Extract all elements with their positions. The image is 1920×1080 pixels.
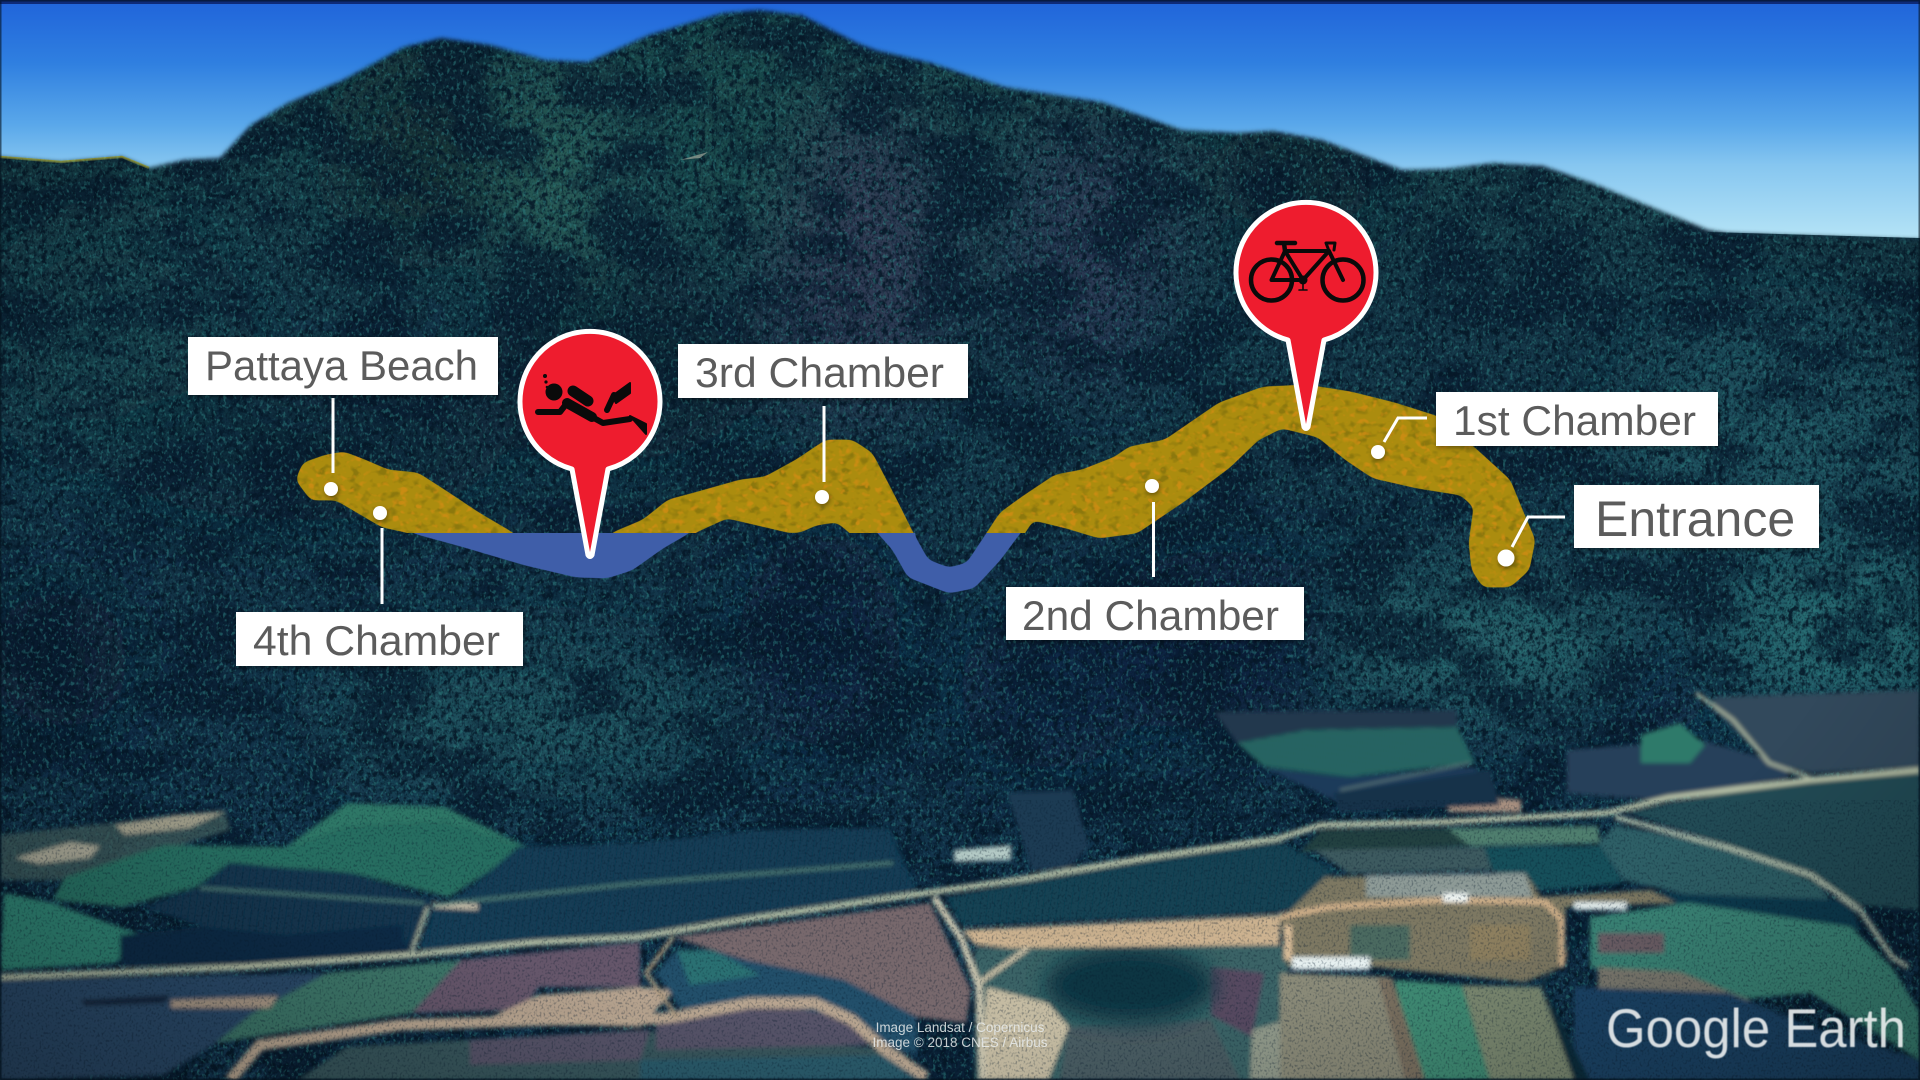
brown field	[673, 903, 971, 1023]
pin: bicycle	[1236, 202, 1376, 428]
cave: flooded sections	[390, 500, 1050, 610]
label: 1st Chamber: 1st Chamber	[1453, 397, 1696, 444]
fields south of the road right	[1300, 828, 1490, 852]
icon: bicycle	[1251, 243, 1364, 300]
far ridge: left	[0, 157, 149, 240]
sky background	[0, 0, 1920, 250]
image credit: Image Landsat / Copernicus	[876, 1020, 1045, 1035]
lower-left ground	[298, 1030, 930, 1080]
icon: scuba diver	[538, 374, 646, 434]
sand area	[480, 987, 675, 1027]
image credit: Image © 2018 CNES / Airbus	[872, 1035, 1048, 1050]
image credit	[872, 1020, 1048, 1050]
dark tree belt	[120, 925, 408, 965]
label: 4th Chamber: 4th Chamber	[253, 617, 500, 664]
leader line: 4th Chamber	[380, 528, 384, 604]
pin: diver	[520, 331, 660, 556]
centre-right ground	[975, 945, 1288, 1080]
leader line: Entrance	[1512, 517, 1565, 547]
dark field north	[1007, 790, 1089, 870]
left pasture	[0, 893, 147, 970]
leader line: 3rd Chamber	[822, 406, 826, 482]
cave: dry sections in gold	[280, 370, 1550, 600]
dark orchard	[143, 863, 433, 960]
left village	[0, 810, 230, 880]
chamber markers	[324, 445, 1514, 566]
lower-right fields	[1280, 973, 1419, 1080]
fields south of the road	[0, 973, 327, 1080]
bright buildings	[1292, 957, 1370, 970]
teal-blue field	[656, 950, 917, 1053]
label: 2nd Chamber: 2nd Chamber	[1022, 592, 1279, 639]
roads	[962, 915, 1280, 948]
mid-slope orchards and fields right	[1237, 727, 1475, 777]
green orchard	[53, 803, 527, 907]
leader line: 1st Chamber	[1384, 418, 1427, 442]
label: Entrance: Entrance	[1595, 491, 1795, 547]
plantation south of the road	[946, 842, 1333, 925]
compound	[1280, 873, 1676, 982]
leader line: Pattaya Beach	[332, 398, 334, 473]
leader line: 2nd Chamber	[1152, 502, 1155, 577]
label: 3rd Chamber: 3rd Chamber	[695, 349, 944, 396]
plantation north of the road	[420, 828, 917, 950]
far ridge: right	[1708, 232, 1920, 300]
label: Pattaya Beach: Pattaya Beach	[205, 342, 478, 389]
fields north of the road right	[1333, 770, 1500, 812]
farmland	[0, 690, 1920, 1080]
field strip right of compound	[1590, 903, 1920, 1060]
